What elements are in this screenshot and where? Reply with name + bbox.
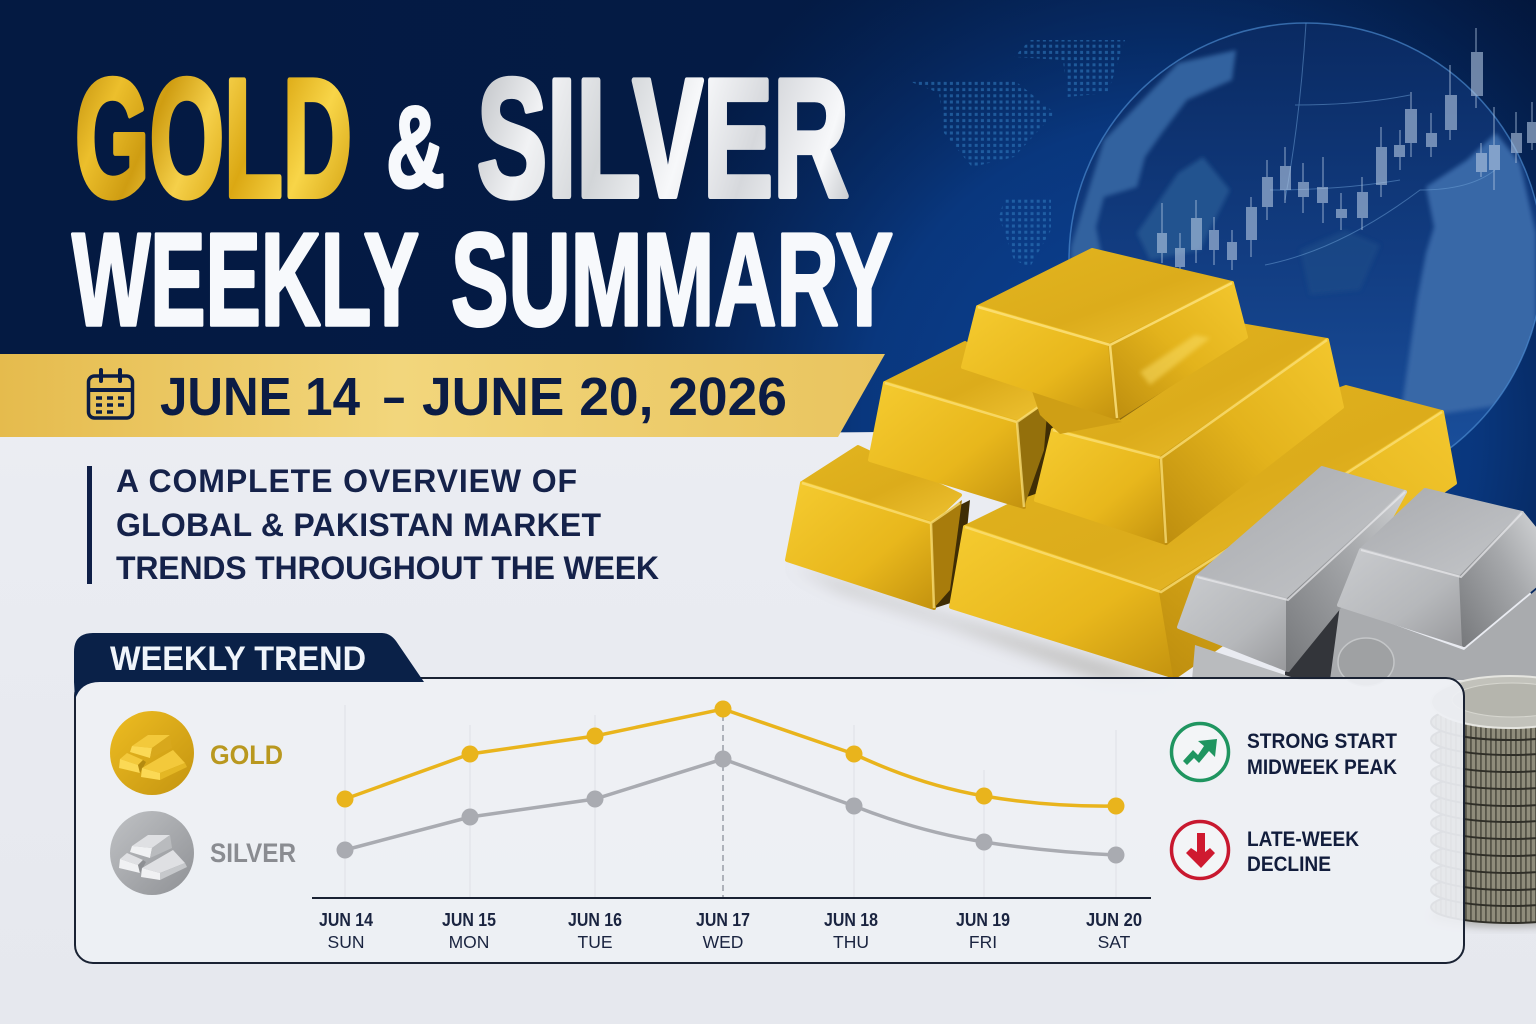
- world dot map: [906, 40, 1125, 267]
- gold bars stack: [787, 250, 1455, 682]
- date text: JUNE 14: [160, 367, 360, 427]
- bar: top: [963, 250, 1246, 434]
- title: weekly summary: WEEKLY: [72, 206, 419, 353]
- subtitle: GLOBAL & PAKISTAN MARKET: [116, 507, 601, 543]
- title: weekly summary: SUMMARY: [451, 206, 893, 353]
- axis labels: JUN 14: [319, 910, 373, 930]
- axis labels: JUN 19: [956, 910, 1010, 930]
- globe: [1069, 23, 1536, 497]
- axis labels: JUN 18: [824, 910, 878, 930]
- icon: calendar: [88, 370, 132, 418]
- callout: strong start midweek peak: [1172, 724, 1397, 780]
- silver bar: left: [1179, 468, 1405, 670]
- date text: JUNE 20, 2026: [422, 367, 787, 427]
- axis labels: JUN 17: [696, 910, 750, 930]
- title: weekly summary: [72, 206, 893, 353]
- axis labels: SAT: [1098, 932, 1131, 952]
- bar: middle right: [1036, 318, 1342, 543]
- gold series: [336, 700, 1124, 814]
- callout: late-week decline: LATE-WEEK: [1247, 828, 1359, 851]
- legend: silver: [110, 811, 296, 895]
- callout: strong start midweek peak: STRONG START: [1247, 730, 1397, 753]
- legend: gold: [110, 711, 283, 795]
- candlestick chart: [1157, 28, 1536, 270]
- callout: late-week decline: DECLINE: [1247, 853, 1331, 876]
- axis labels: FRI: [969, 932, 997, 952]
- axis labels: WED: [703, 932, 743, 952]
- callout: late-week decline: [1172, 822, 1359, 878]
- tab: weekly trend heading: [74, 633, 424, 700]
- axis labels: JUN 20: [1086, 910, 1142, 930]
- axis labels: JUN 16: [568, 910, 622, 930]
- line chart: [312, 700, 1151, 898]
- date text: –: [383, 367, 405, 427]
- subtitle: [87, 463, 659, 586]
- silver series: [336, 750, 1124, 864]
- subtitle: A COMPLETE OVERVIEW OF: [116, 463, 577, 499]
- silver coin: [1338, 638, 1394, 686]
- silver bars: [1179, 468, 1536, 686]
- axis labels: SUN: [328, 932, 364, 952]
- subtitle: TRENDS THROUGHOUT THE WEEK: [116, 550, 659, 586]
- bar: bottom left: [787, 447, 962, 608]
- bar: bottom long: [951, 387, 1455, 677]
- tab: weekly trend heading: WEEKLY TREND: [110, 640, 366, 678]
- title: gold and silver: GOLD: [75, 44, 352, 232]
- title: gold and silver: [75, 44, 849, 232]
- bar: middle left: [870, 343, 1048, 507]
- title: gold and silver: SILVER: [477, 44, 849, 232]
- axis labels: THU: [833, 932, 869, 952]
- callout: strong start midweek peak: MIDWEEK PEAK: [1247, 756, 1397, 779]
- axis labels: JUN 15: [442, 910, 496, 930]
- date ribbon: [0, 354, 885, 437]
- axis labels: TUE: [578, 932, 612, 952]
- title: gold and silver: &: [386, 82, 445, 212]
- axis labels: [319, 910, 1142, 952]
- silver bar: right: [1339, 490, 1536, 645]
- legend: silver: SILVER: [210, 838, 296, 868]
- axis labels: MON: [449, 932, 489, 952]
- date text: [160, 367, 787, 427]
- panel: weekly trend: [75, 678, 1464, 963]
- legend: gold: GOLD: [210, 740, 283, 770]
- coin stack: [1431, 676, 1536, 926]
